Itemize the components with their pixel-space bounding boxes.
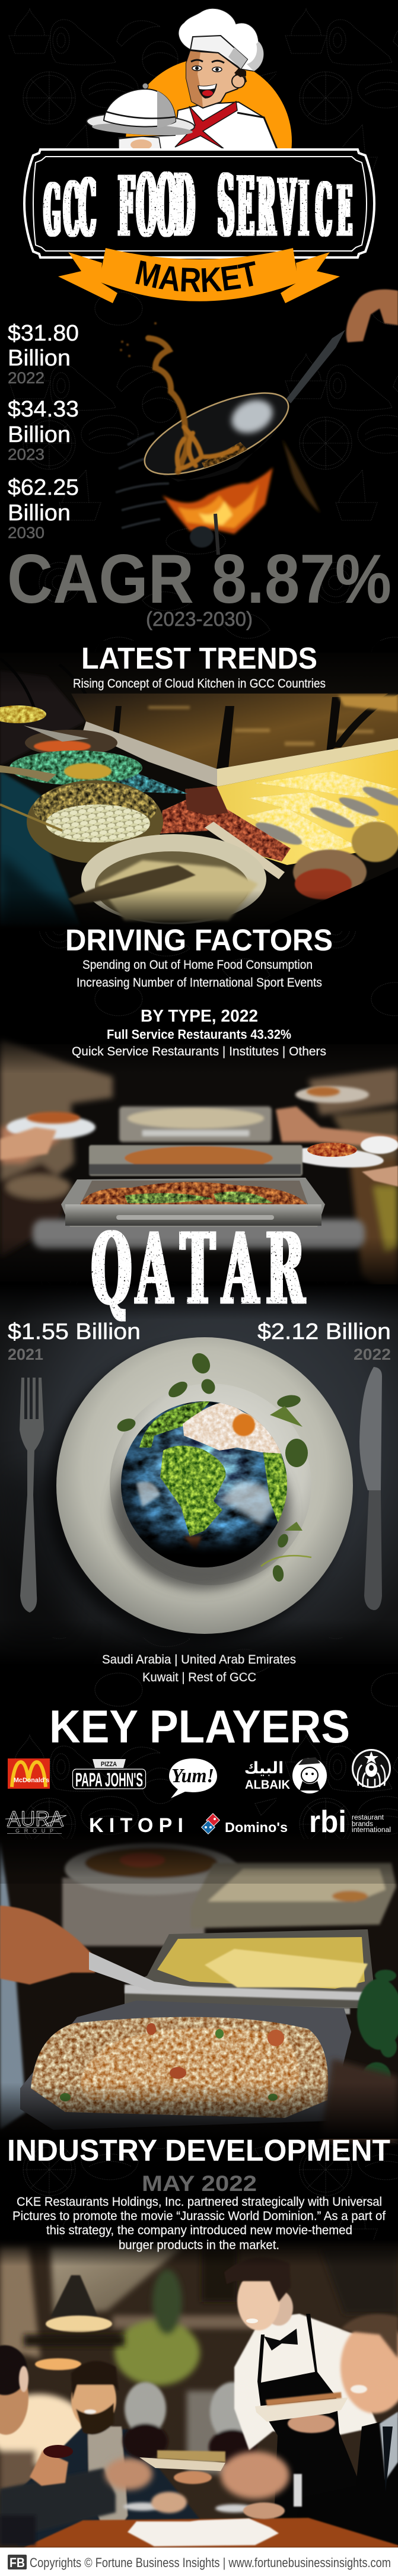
- development description: CKE Restaurants Holdings, Inc. partnered strategically with Universal: [17, 2195, 382, 2209]
- logo row 2: [5, 1805, 391, 1839]
- other segments: Quick Service Restaurants | Institutes | Others: [72, 1045, 326, 1058]
- regional list: [102, 1653, 296, 1684]
- stat 2022: [8, 321, 79, 387]
- CAGR headline: (2023-2030): [146, 608, 253, 631]
- blue serving surface: [0, 771, 80, 926]
- title: GCC Food Service: O: [136, 155, 157, 256]
- photo: buffet counter: [0, 641, 398, 931]
- heading: driving factors: DRIVING FACTORS: [65, 923, 333, 957]
- photo: chafing dish buffet line: [0, 1032, 398, 1305]
- logo: Yum: Yum!: [171, 1765, 214, 1787]
- logo: McDonald's: [8, 1758, 50, 1789]
- stat 2023: 2023: [8, 446, 44, 463]
- stat 2022: 2022: [8, 369, 44, 387]
- lit food trays: [185, 750, 398, 865]
- development description: this strategy, the company introduced new movie-themed: [46, 2224, 352, 2237]
- pendant lamps: [24, 2275, 125, 2370]
- factor items: [77, 958, 322, 990]
- title badge frame: [24, 150, 374, 257]
- glass sneeze guard: [71, 694, 398, 769]
- photo: waiter serving diners: [0, 2240, 398, 2548]
- logo: Domino's: [202, 1814, 288, 1835]
- logo: Yum: [169, 1758, 217, 1798]
- title: GCC Food Service: C: [79, 162, 96, 254]
- logo: Restaurant Brands International: brands: [352, 1821, 373, 1828]
- regional list: Saudi Arabia | United Arab Emirates: [102, 1653, 296, 1667]
- right plates and arm: [295, 1086, 369, 1103]
- development description: burger products in the market.: [119, 2238, 279, 2252]
- regional list: Kuwait | Rest of GCC: [142, 1671, 256, 1684]
- Qatar 2021 value: [8, 1319, 141, 1363]
- heading: Qatar: T: [180, 1211, 215, 1327]
- stat 2030: Billion: [8, 501, 71, 526]
- guest at right: [221, 2314, 398, 2545]
- bowl of rice: [65, 1843, 238, 1895]
- table with dishes: [0, 2492, 398, 2548]
- sauce cup: [352, 822, 398, 862]
- upper steel pan: [62, 1878, 205, 1946]
- logo: Starbucks: [352, 1749, 391, 1788]
- serving tongs: [253, 783, 398, 849]
- stat 2022: $31.80: [8, 321, 79, 346]
- blurred guests: [0, 1038, 398, 1305]
- Qatar 2021 value: 2021: [8, 1346, 43, 1363]
- striped bowl of eggs: [27, 780, 163, 863]
- logo: Albaik: ALBAIK: [245, 1778, 290, 1792]
- market size figures: [8, 321, 79, 542]
- header: chef mascot and title badge: [23, 8, 375, 303]
- logo: Papa John's: [72, 1759, 146, 1791]
- development date: MAY 2022: [142, 2171, 257, 2196]
- heading: latest trends: [73, 641, 326, 691]
- heading: driving factors: [65, 923, 333, 990]
- stat 2030: 2030: [8, 524, 44, 542]
- edge fades: [254, 867, 398, 931]
- title: GCC Food Service: C: [63, 165, 79, 253]
- white bowl of bananas: [81, 834, 266, 924]
- title: GCC Food Service: G: [44, 168, 61, 253]
- front tray with chicken: [33, 1178, 365, 1249]
- hand with tongs: [0, 1906, 205, 1990]
- wine glasses: [123, 2382, 256, 2513]
- heading: Qatar: A: [222, 1211, 259, 1327]
- herb leaves: [116, 1350, 311, 1582]
- bearded guest: [18, 2361, 205, 2545]
- logo: Restaurant Brands International: [309, 1805, 391, 1839]
- leading segment: Full Service Restaurants 43.32%: [107, 1027, 291, 1042]
- logo: Restaurant Brands International: international: [352, 1827, 391, 1834]
- logo: McDonald's: McDonald's: [14, 1777, 49, 1784]
- stat 2023: Billion: [8, 422, 71, 447]
- sushi plates: [139, 2392, 348, 2484]
- logo: Restaurant Brands International: rbi: [309, 1805, 346, 1839]
- logo: Kitopi: KITOPI: [89, 1814, 183, 1837]
- photo: steel trays of rice and potatoes: [0, 1824, 398, 2142]
- upper right tray: [191, 1863, 396, 1928]
- title: GCC Food Service: R: [257, 160, 276, 255]
- stat 2022: Billion: [8, 346, 71, 371]
- logo: Aura Group: GROUP: [15, 1828, 53, 1834]
- photo: flaming wok toss: [116, 290, 398, 555]
- heading: industry development: INDUSTRY DEVELOPMENT: [7, 2133, 390, 2167]
- Qatar 2022 value: [257, 1319, 391, 1363]
- title: GCC Food Service: [44, 155, 352, 256]
- stat 2023: $34.33: [8, 397, 79, 422]
- photo: globe on a plate with cutlery: [0, 1284, 398, 1667]
- segment: by type: BY TYPE, 2022: [141, 1007, 258, 1026]
- heading: Qatar: [91, 1211, 305, 1327]
- development description: [12, 2195, 386, 2252]
- factor items: Spending on Out of Home Food Consumption: [82, 958, 313, 972]
- title: GCC Food Service: E: [237, 158, 254, 256]
- left plate and hand: [7, 1115, 95, 1139]
- pattern overlay on lower sections: [0, 1637, 398, 1839]
- wok: [134, 290, 398, 491]
- title: GCC Food Service: I: [299, 165, 308, 254]
- Qatar 2021 value: $1.55 Billion: [8, 1319, 141, 1344]
- stat 2030: $62.25: [8, 475, 79, 500]
- segment: by type: [72, 1007, 326, 1058]
- logo: Papa John's: PAPA JOHN'S: [75, 1769, 143, 1791]
- development description: Pictures to promote the movie “Jurassic World Dominion.” As a part of: [12, 2209, 386, 2223]
- globe made of food: [121, 1401, 287, 1567]
- Qatar 2022 value: $2.12 Billion: [257, 1319, 391, 1344]
- icon: Fortune Business Insights logo: FB: [9, 2555, 25, 2570]
- heading: Qatar: R: [266, 1211, 305, 1327]
- title: GCC Food Service: O: [157, 155, 177, 256]
- back tray: [119, 1106, 272, 1142]
- burner: [116, 433, 169, 528]
- main rice tray: [20, 2001, 351, 2130]
- factor items: Increasing Number of International Sport Events: [77, 976, 322, 990]
- trend item: Rising Concept of Cloud Kitchen in GCC Countries: [73, 676, 326, 691]
- icon: fork: [20, 1378, 44, 1613]
- stat 2030: [8, 475, 79, 542]
- counter edge: [83, 721, 217, 786]
- stat 2023: [8, 397, 79, 463]
- ribbon label: MARKET: [135, 260, 256, 292]
- title: GCC Food Service: F: [119, 158, 134, 256]
- logo: Albaik: البيك: [244, 1759, 284, 1777]
- flame: [163, 468, 273, 534]
- heading: latest trends: LATEST TRENDS: [81, 641, 317, 675]
- icon: knife: [359, 1367, 382, 1610]
- logo: Domino's: Domino's: [225, 1820, 288, 1835]
- heading: Qatar: A: [135, 1211, 173, 1327]
- heading: Qatar: Q: [91, 1211, 132, 1327]
- logo: Papa John's: PIZZA: [101, 1761, 117, 1768]
- fruit plates: [0, 705, 46, 723]
- middle tray of potatoes: [125, 1929, 374, 2014]
- left pillar: [0, 1839, 26, 2130]
- sauce splash: [121, 323, 237, 472]
- logo: Aura Group: AURA: [7, 1807, 63, 1831]
- logo: Albaik: [244, 1757, 327, 1793]
- wok handle: [286, 330, 345, 403]
- waiter: [224, 2257, 378, 2545]
- footer: [0, 2548, 398, 2576]
- hand: [346, 290, 398, 342]
- title: GCC Food Service: E: [337, 171, 352, 253]
- logo: Restaurant Brands International: restaurant: [352, 1814, 384, 1821]
- title: GCC Food Service: V: [279, 162, 296, 254]
- near-left guest: [0, 2345, 152, 2540]
- icon: chef holding cloche: [86, 8, 278, 152]
- heading: key players: KEY PLAYERS: [49, 1700, 350, 1753]
- ribbon: market: [58, 248, 340, 303]
- restaurant background: [0, 2246, 398, 2492]
- cured meats: [160, 798, 291, 861]
- Qatar 2022 value: 2022: [354, 1346, 391, 1363]
- logo row 1: [8, 1749, 391, 1798]
- middle tray: [89, 1145, 303, 1176]
- plate: [47, 1337, 353, 1643]
- orange circle behind chef: [126, 61, 292, 148]
- title: GCC Food Service: S: [218, 156, 234, 256]
- title: GCC Food Service: C: [316, 167, 332, 253]
- title: GCC Food Service: D: [174, 155, 195, 256]
- foliage: [357, 1970, 398, 2091]
